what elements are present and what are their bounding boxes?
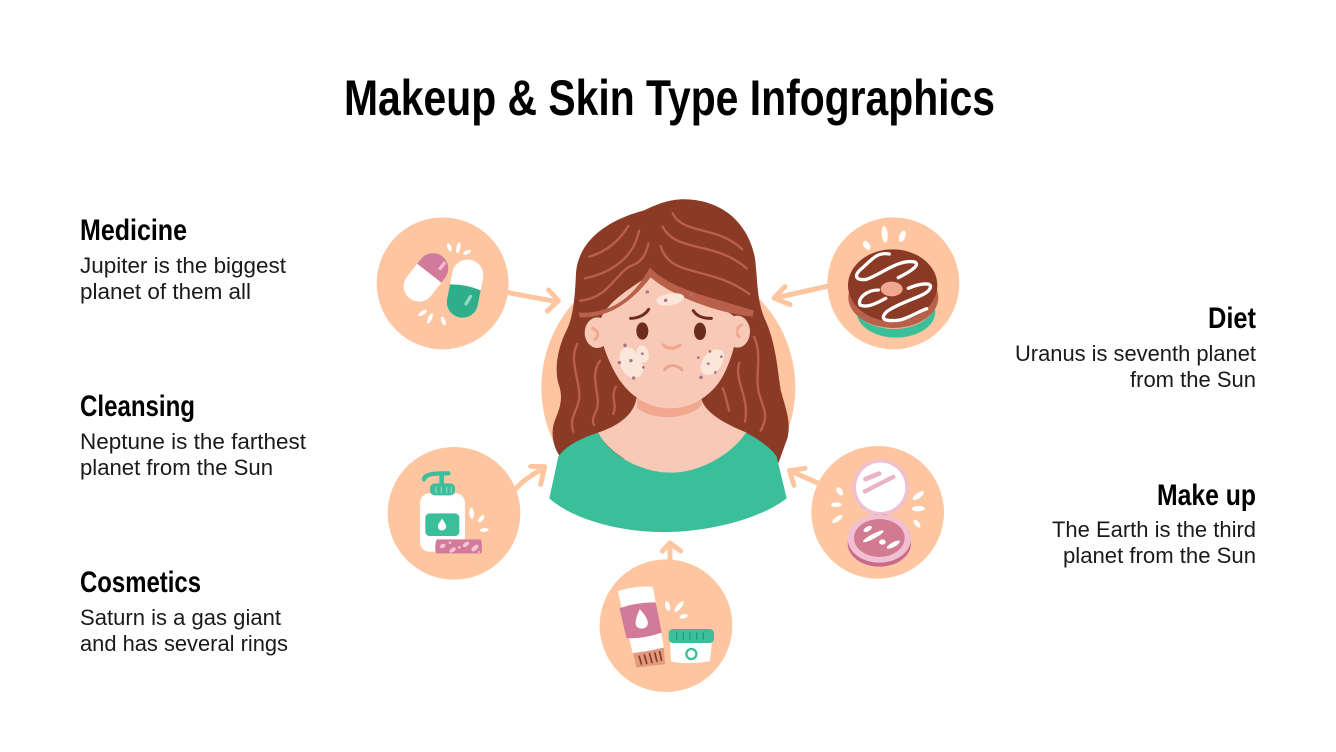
- icon: soap bar: [435, 539, 482, 554]
- arrow: [774, 286, 828, 305]
- eyebrows: [631, 309, 711, 318]
- text block: diet: from the Sun: [1130, 367, 1256, 392]
- arrow: [662, 543, 681, 562]
- icon: pump bottle: [420, 473, 465, 552]
- title: Makeup & Skin Type Infographics: [344, 70, 995, 126]
- ears: [585, 316, 750, 348]
- panel: cleansing icon: [388, 447, 545, 580]
- text block: cleansing: Neptune is the farthest: [80, 429, 307, 454]
- green top: [549, 433, 787, 532]
- sparkles: [664, 600, 688, 619]
- text block: cosmetics: [80, 566, 288, 656]
- peach backdrop circle: [541, 260, 795, 514]
- text block: make up: planet from the Sun: [1063, 543, 1256, 568]
- text block: make up: Make up: [1157, 479, 1256, 512]
- text block: medicine: Medicine: [80, 214, 187, 247]
- hair fringe: [578, 267, 754, 317]
- panel: cosmetics icon: [600, 543, 732, 692]
- central character: woman with acne: [541, 199, 795, 532]
- arrow: [515, 466, 545, 489]
- sparkles: [469, 507, 489, 532]
- panel: diet icon: [774, 217, 959, 349]
- icon: pink and white capsule: [397, 247, 454, 308]
- skin patches: [619, 293, 724, 378]
- icon: cream jar: [669, 629, 714, 663]
- neck: [598, 397, 747, 473]
- text block: cleansing: planet from the Sun: [80, 455, 273, 480]
- eyes: [636, 322, 706, 340]
- nose and mouth: [663, 345, 682, 370]
- text block: diet: [1015, 302, 1257, 392]
- face: [599, 275, 736, 408]
- hair: [553, 199, 789, 463]
- sparkles: [861, 226, 907, 251]
- icon: green and white capsule: [444, 257, 486, 320]
- text block: cosmetics: and has several rings: [80, 631, 288, 656]
- icon: cream tube: [617, 585, 666, 669]
- text block: cleansing: Cleansing: [80, 390, 195, 423]
- hair strands: [572, 213, 765, 432]
- icon: donut: [848, 249, 938, 338]
- text block: make up: [1052, 479, 1256, 568]
- sparkles: [831, 486, 925, 529]
- panel: make up icon: [789, 446, 944, 579]
- text block: diet: Uranus is seventh planet: [1015, 341, 1257, 366]
- text block: make up: The Earth is the third: [1052, 517, 1256, 542]
- text block: cosmetics: Cosmetics: [80, 566, 201, 599]
- text block: cosmetics: Saturn is a gas giant: [80, 605, 282, 630]
- panel: medicine icon: [377, 217, 558, 349]
- neck shadow: [637, 398, 702, 417]
- icon: compact mirror: [848, 459, 911, 567]
- text block: medicine: planet of them all: [80, 279, 251, 304]
- arrow: [789, 468, 817, 485]
- text block: medicine: Jupiter is the biggest: [80, 253, 287, 278]
- text block: medicine: [80, 214, 287, 304]
- text block: diet: Diet: [1208, 302, 1256, 335]
- arrow: [508, 290, 558, 311]
- sparkles: [417, 242, 472, 326]
- text block: cleansing: [80, 390, 307, 480]
- acne spots: [618, 290, 723, 380]
